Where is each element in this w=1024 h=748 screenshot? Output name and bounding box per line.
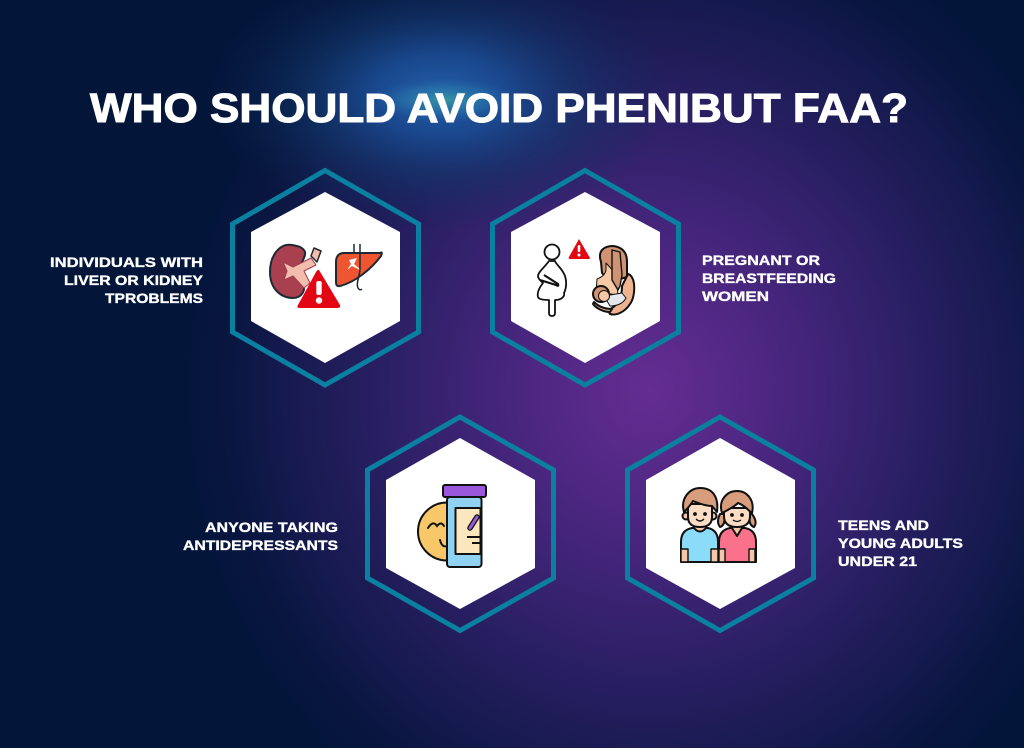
label: teens and young adults: YOUNG ADULTS <box>838 535 963 551</box>
label: liver or kidney: INDIVIDUALS WITH <box>50 254 203 270</box>
label: pregnant or breastfeeding <box>702 252 836 304</box>
label: pregnant or breastfeeding: PREGNANT OR <box>702 252 820 268</box>
label: teens and young adults: TEENS AND <box>838 517 929 533</box>
icon: smiling face behind bottle <box>418 502 476 560</box>
icon: girl <box>718 491 756 562</box>
icon: pill bottle <box>443 485 486 567</box>
icon: liver <box>336 244 382 290</box>
hexagon: white panel <box>511 192 660 363</box>
hexagon frame: antidepressants <box>368 417 554 630</box>
icon: boy <box>681 488 718 562</box>
label: teens and young adults: UNDER 21 <box>838 553 917 569</box>
panel: antidepressants <box>368 417 554 630</box>
hexagon: white panel <box>646 438 795 609</box>
label: liver or kidney: TPROBLEMS <box>105 290 203 306</box>
label: antidepressants: ANYONE TAKING <box>205 519 338 535</box>
panel: liver or kidney problems <box>232 170 418 385</box>
hexagon frame: pregnant <box>492 170 678 385</box>
panel: teens and young adults <box>628 417 814 630</box>
title: WHO SHOULD AVOID PHENIBUT FAA? <box>90 85 908 131</box>
icon: breastfeeding mother <box>593 246 634 315</box>
label: antidepressants <box>183 519 338 553</box>
hexagon frame: teens <box>628 417 814 630</box>
panel: pregnant or breastfeeding <box>492 170 678 385</box>
label: liver or kidney <box>50 254 204 306</box>
hexagon: white panel <box>386 438 535 609</box>
hexagon frame: liver or kidney <box>232 170 418 385</box>
label: pregnant or breastfeeding: BREASTFEEDING <box>702 270 836 286</box>
hexagon: white panel <box>251 192 400 363</box>
icon: kidney <box>270 245 321 298</box>
icon: warning triangle <box>297 270 340 308</box>
label: pregnant or breastfeeding: WOMEN <box>702 288 769 304</box>
label: antidepressants: ANTIDEPRESSANTS <box>183 537 338 553</box>
icon: pregnant woman <box>538 244 566 316</box>
label: liver or kidney: LIVER OR KIDNEY <box>64 272 204 288</box>
icon: small warning triangle <box>569 239 590 259</box>
label: teens and young adults <box>838 517 963 569</box>
